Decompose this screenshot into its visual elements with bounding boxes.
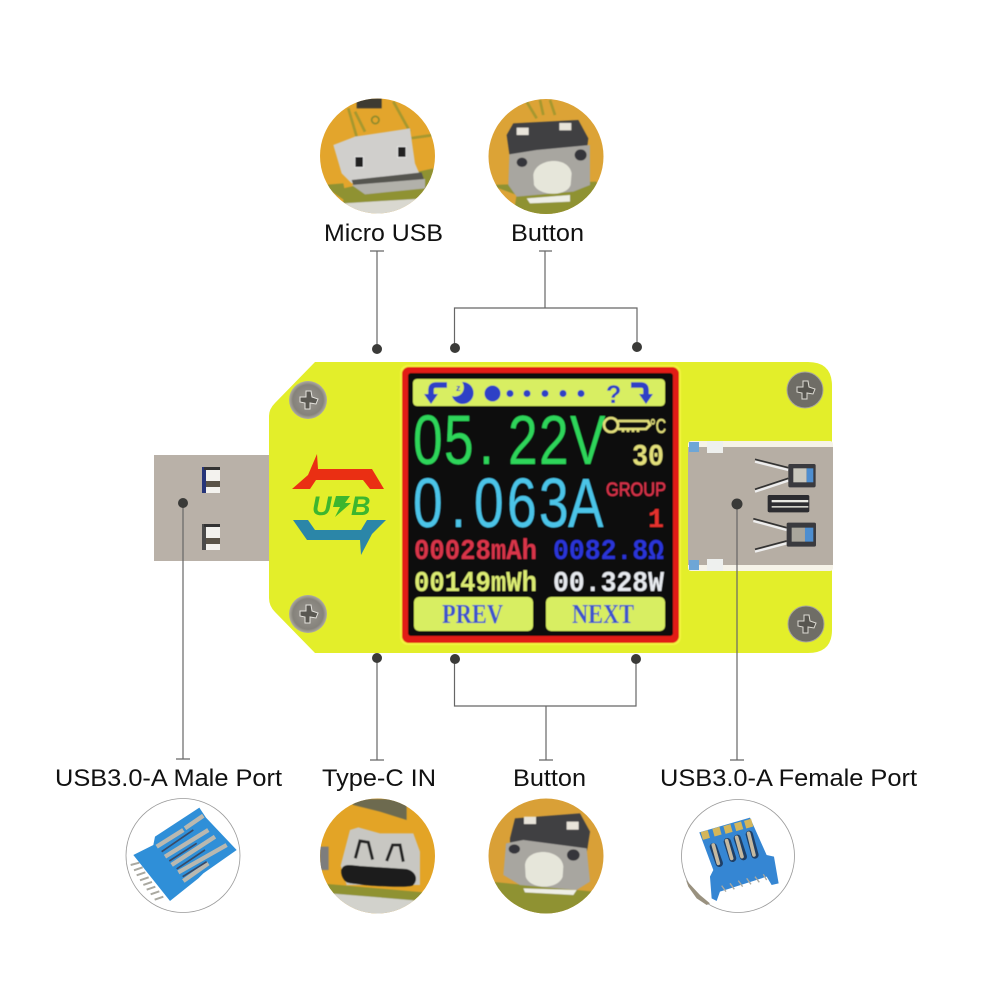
NEXT button: [546, 597, 665, 631]
icon: top button photo: [486, 97, 606, 217]
energy reading: 00149mWh: [414, 567, 537, 600]
screw top-left: [289, 381, 327, 419]
icon: bottom button photo: [486, 797, 606, 918]
label: Type-C IN: Type-C IN: [322, 765, 436, 792]
USB logo with arrows: U: [312, 491, 333, 521]
power reading: 00.328W: [553, 567, 665, 600]
voltage reading: 05.22V: [413, 402, 606, 480]
screw bottom-left: [289, 595, 327, 633]
upper contact: [755, 459, 816, 492]
top status bar: z: [456, 383, 461, 393]
leader: Micro USB: [370, 251, 384, 354]
label: USB3.0-A Male Port: USB3.0-A Male Port: [55, 765, 282, 792]
PREV button: [414, 597, 533, 631]
label: Button top: Button: [511, 220, 584, 247]
yellow-green board: [269, 362, 832, 653]
label: Button bottom: Button: [513, 765, 586, 792]
leader: USB3.0-A Male Port: [176, 498, 190, 759]
middle contact: [768, 495, 809, 512]
icon: micro USB photo: [320, 98, 435, 214]
leader: Type-C IN: [370, 653, 384, 760]
lower contact: [753, 519, 816, 552]
leader: top Button bracket: [450, 251, 642, 353]
resistance reading: 0082.8Ω: [553, 535, 664, 568]
temperature unit: °C: [650, 416, 666, 438]
PREV button: PREV: [442, 599, 503, 629]
USB male plug: [154, 455, 270, 561]
group number: 1: [648, 506, 664, 536]
top status bar: [413, 379, 665, 409]
icon: USB male connector photo: [126, 798, 240, 912]
screw top-right: [787, 372, 823, 408]
temperature icon: [604, 418, 650, 432]
label: Micro USB: Micro USB: [324, 220, 443, 247]
USB female port: [688, 441, 833, 571]
leader: USB3.0-A Female Port: [730, 498, 744, 760]
screw bottom-right: [788, 606, 824, 642]
USB logo with arrows: [292, 454, 386, 555]
group label: GROUP: [606, 480, 666, 501]
leader: bottom Button bracket: [450, 654, 641, 760]
current reading: 0.063A: [413, 465, 604, 543]
icon: USB female connector photo: [682, 800, 794, 912]
NEXT button: NEXT: [572, 599, 634, 629]
plug hole lower: [202, 524, 220, 550]
temperature value: 30: [632, 440, 664, 475]
capacity reading: 00028mAh: [414, 535, 537, 568]
label: USB3.0-A Female Port: USB3.0-A Female Port: [660, 765, 917, 792]
plug hole upper: [202, 467, 220, 493]
icon: type-C photo: [318, 797, 438, 918]
top status bar: ?: [606, 381, 621, 409]
USB logo with arrows: B: [351, 491, 370, 521]
LCD screen: [400, 365, 681, 645]
